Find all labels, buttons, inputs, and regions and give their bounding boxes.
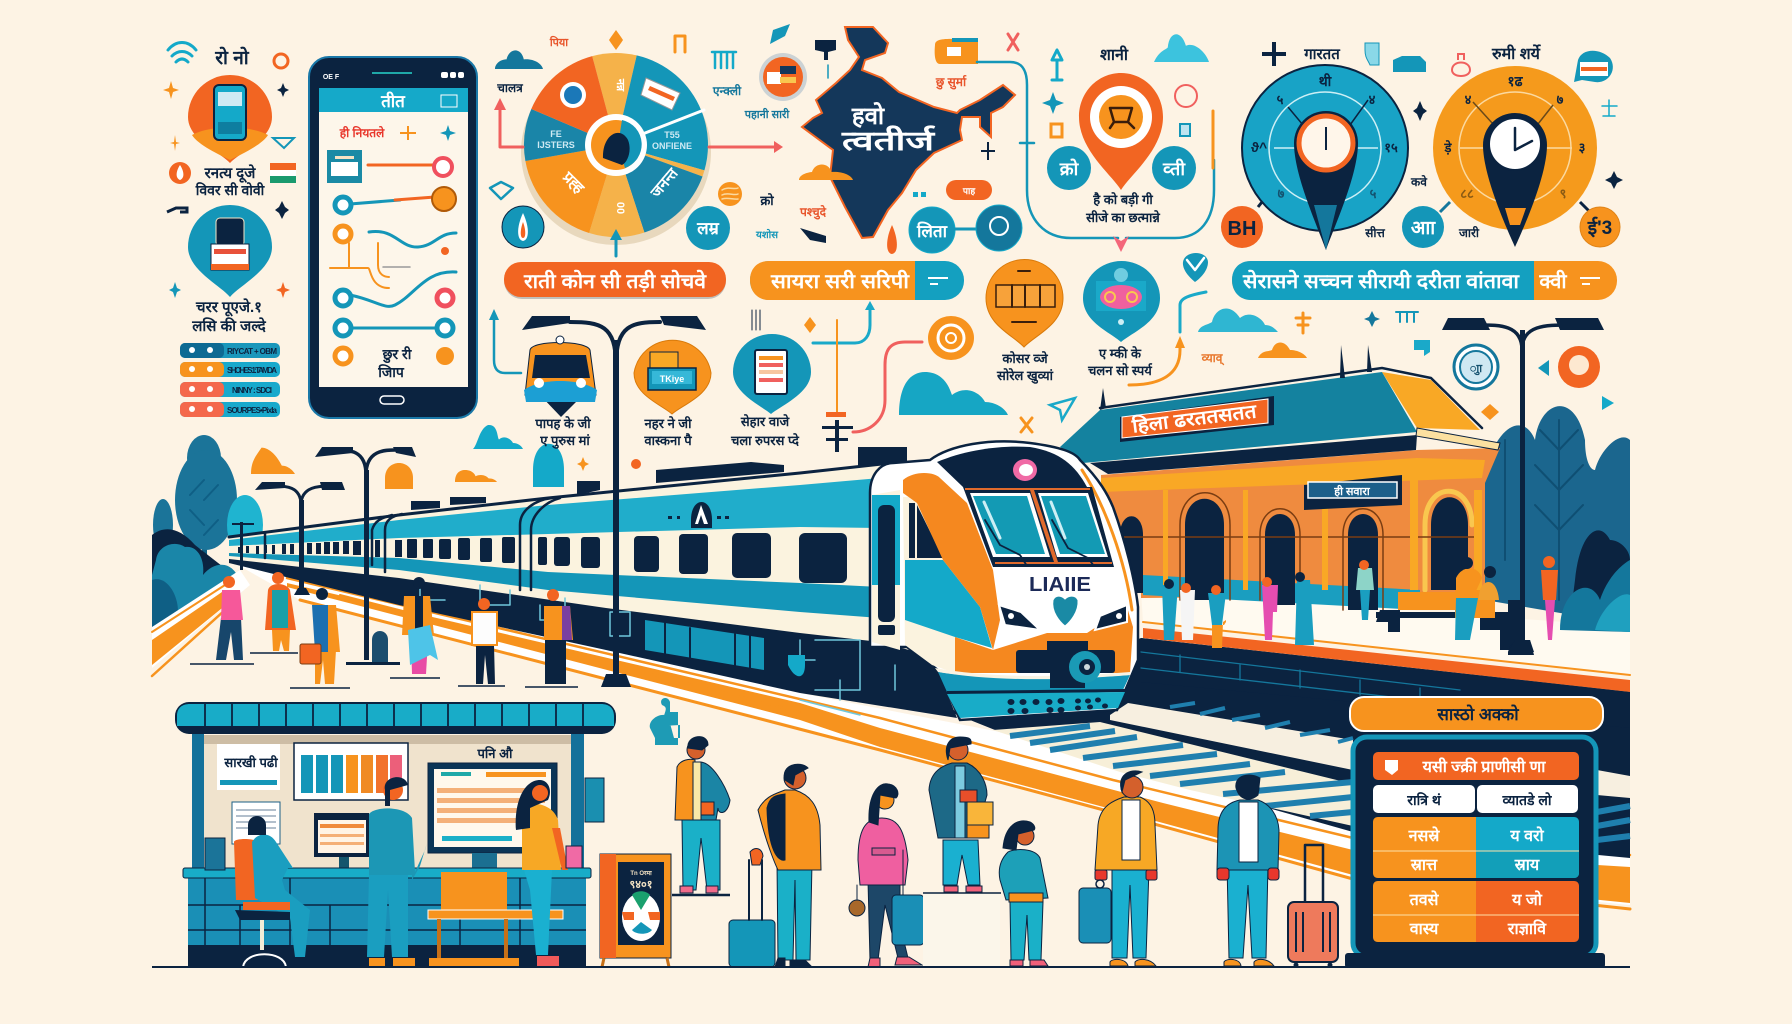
sign header [1350, 697, 1603, 731]
kiosk posts [192, 733, 584, 968]
pole and lines middle [822, 320, 922, 452]
people at the station [1162, 556, 1558, 652]
kiosk wall [204, 735, 571, 870]
status bar [323, 72, 464, 81]
map surroundings: पाह [962, 186, 976, 196]
roof sign: हिला ढरततसतत [1130, 399, 1259, 438]
pie wheel [521, 53, 711, 245]
passenger: teal jacket [1217, 775, 1279, 966]
main display [428, 763, 557, 869]
information stand [600, 854, 671, 967]
decor sparkles [163, 81, 294, 298]
passenger: yellow jacket [1079, 771, 1157, 966]
information column: top left [163, 42, 296, 417]
suitcase: coral [1288, 845, 1338, 967]
text block [191, 298, 267, 335]
text block: वास्कना पै [643, 433, 692, 448]
small monitor [314, 813, 369, 869]
text block [730, 414, 800, 448]
clouds, small icons between pins [752, 308, 1430, 432]
wheel labels: FE [550, 129, 562, 139]
arrow: to train pin [489, 309, 521, 373]
scene background: trees left [152, 435, 263, 633]
clock badges: कवे [1410, 175, 1428, 189]
clouds, small icons between pins: व्याव् [1201, 351, 1224, 366]
wheel labels: IJSTERS [537, 140, 575, 150]
sign cells: य वरो [1509, 826, 1545, 845]
text block: ए पुरुस मां [539, 433, 590, 449]
sign cells: नसस्रे [1408, 826, 1440, 845]
legend: SOURPES•Pixla [227, 406, 278, 415]
foreground platform band [229, 560, 1630, 909]
legend: RIYCAT + OBM [227, 347, 277, 356]
carriage doors [265, 498, 560, 590]
icon: wifi [168, 42, 196, 62]
roof beacon [1013, 459, 1037, 481]
text block: सीजे का छत्मान्ने [1085, 210, 1160, 225]
sign cells: व्यातडे लो [1501, 792, 1553, 808]
text block: है को बड़ी गी [1092, 192, 1153, 207]
banner: teal-yellow: क्वी [1538, 269, 1567, 293]
pin: display [1083, 261, 1160, 342]
pin: ticket machine [188, 205, 272, 297]
poster: text [217, 744, 280, 790]
carriage emblem [668, 502, 729, 528]
wheel labels: 00 [614, 202, 626, 214]
clock dial: teal: थी [1319, 73, 1333, 89]
pin: ticket counter [634, 340, 711, 414]
text block [996, 351, 1054, 384]
text block: चरर पूएजे.१ [195, 298, 262, 317]
kiosk [175, 702, 616, 968]
text block: पापह के जी [534, 416, 591, 431]
text block: ए म्की के [1098, 346, 1142, 361]
tracks [950, 638, 1630, 858]
lamp posts on the far platform [1442, 318, 1604, 655]
bench [428, 872, 563, 967]
orange sweep [903, 473, 1000, 650]
arrows around the wheel [494, 98, 783, 256]
clock dial: orange: ड़े [1444, 140, 1453, 155]
banner: orange: राती कोन सी तड़ी सोचवे [523, 269, 707, 293]
heading and decor: शानी [1100, 45, 1129, 64]
clock dial: orange [1433, 66, 1597, 247]
top right heading row: गारतत [1303, 46, 1341, 63]
poster: text: सारखी पढी [223, 755, 278, 770]
cloud and labels above the wheel [495, 30, 742, 98]
pin: tablet [733, 334, 811, 414]
status bar: OE F [323, 74, 340, 81]
passengers on the platform [190, 572, 578, 688]
clock dial: orange: ९ [1560, 186, 1566, 201]
text block: नहर ने जी [644, 416, 692, 431]
clock badges: ई'3 [1587, 216, 1612, 239]
station building [1060, 345, 1500, 610]
heading: रो नो [214, 46, 250, 69]
passenger: grey coat [923, 737, 1001, 893]
drop [887, 225, 897, 254]
banner: teal-yellow: सेरासने सच्चन सीरायी दरीता वांतावा [1242, 269, 1520, 293]
india map [802, 27, 1015, 254]
clock dial: orange: ७ [1557, 92, 1564, 107]
legend: NINNY : SDCI [232, 386, 272, 395]
text block [534, 416, 591, 449]
timetable sign [1345, 697, 1605, 968]
seated clerk [234, 816, 310, 967]
text block: चला रुपरस प्दे [730, 433, 800, 448]
map title: हवो [851, 102, 885, 130]
banner: yellow-teal [750, 261, 964, 300]
clock dial: teal: ५ [1370, 186, 1377, 201]
legend: SHOHES 1:TAMDA [227, 366, 277, 375]
text block: कोसर व्जे [1001, 351, 1049, 366]
undercarriage panels [420, 582, 895, 715]
clock dial: teal: ϑ^ [1251, 139, 1267, 155]
home button [380, 396, 404, 404]
badge: orange swirl [928, 316, 974, 360]
wheel labels: ONFIENE [652, 141, 692, 151]
connector frame [977, 62, 1214, 238]
step [923, 893, 1000, 967]
roof [1060, 372, 1417, 463]
left platform edge [152, 570, 250, 676]
connected badges [909, 205, 1022, 253]
windows [238, 533, 847, 583]
wheel labels: जनन्त [647, 164, 682, 202]
lamp posts on the near platform [232, 316, 706, 687]
sign cells: स्राय [1514, 857, 1540, 874]
wheel labels [537, 78, 692, 214]
banner: teal-yellow [1232, 261, 1617, 300]
map title: त्वतीर्ज [841, 125, 935, 156]
banner: yellow-teal: सायरा सरी सरिपी [770, 269, 910, 293]
facade [1101, 448, 1500, 598]
clock dial: teal: ७ [1278, 186, 1285, 201]
wheel labels: प्रह्ह [558, 168, 588, 198]
text block [1087, 346, 1153, 378]
route rows: छुर री [382, 346, 413, 364]
pin labels [1047, 146, 1196, 190]
cab logo: LIAIIE [1029, 574, 1091, 596]
smartphone [309, 57, 477, 418]
ground line [152, 966, 1630, 968]
map surroundings: क्रो [759, 193, 774, 208]
legend [180, 343, 280, 417]
heading and decor [1042, 34, 1209, 137]
hub [585, 114, 647, 176]
pin labels: क्रो [1059, 158, 1080, 179]
route list header [339, 125, 456, 141]
map surroundings: पश्चुदे [799, 205, 827, 220]
text block: सोरेल खुव्यां [996, 368, 1054, 384]
clock dial: orange: ४ [1465, 92, 1472, 107]
standing staff [367, 777, 427, 966]
app title: तीत [380, 91, 406, 111]
bumper and coupler [935, 641, 1130, 718]
wheel labels: नन्न [614, 78, 626, 92]
map surroundings: यशोस [755, 228, 779, 241]
text block: चलन सो स्पर्य [1087, 363, 1153, 378]
passenger: child [999, 821, 1048, 966]
pin: booking desk [986, 260, 1063, 347]
round badges around the wheel: लम्र [696, 219, 720, 238]
cab shield [1053, 596, 1078, 626]
sign header: सास्ठो अक्को [1436, 704, 1519, 724]
arrow: orange curve [1129, 336, 1185, 385]
plaque side [205, 838, 225, 870]
cloud and labels above the wheel: पिया [549, 35, 569, 49]
connected badges: लिता [916, 221, 948, 241]
sign title row [1373, 752, 1579, 780]
trees right of station [1485, 406, 1630, 632]
desk [183, 868, 591, 967]
top right heading row [1262, 42, 1623, 189]
connector marker [1113, 236, 1129, 252]
text block [643, 416, 692, 448]
clock dial: orange: १ढ [1507, 73, 1524, 89]
headlights [999, 605, 1127, 630]
round badges around the wheel [490, 182, 742, 250]
pin: ticket counter: TKiye [660, 374, 684, 384]
cloud and labels above the wheel: चालत्र [496, 81, 524, 95]
orange connector [1212, 111, 1214, 168]
passenger: backpack [729, 764, 821, 967]
clock dial: orange: ३ [1579, 140, 1586, 155]
side display [585, 778, 604, 822]
small figure by the band [650, 698, 680, 745]
arch doors [1120, 516, 1143, 593]
clock badges: BH [1228, 218, 1256, 240]
sign cells: रात्रि थं [1406, 792, 1442, 808]
cloud and labels above the wheel: एन्क्ली [712, 84, 742, 98]
route rows [327, 150, 456, 380]
passenger: orange jacket [672, 737, 730, 895]
route list header: ही नियतले [339, 126, 385, 140]
icon: swirl [274, 54, 288, 68]
clock badges: आा [1411, 218, 1436, 239]
sign cells: स्रात्त [1410, 857, 1438, 874]
passenger: pink top [849, 784, 924, 967]
text block: विवर सी वोवी [195, 182, 266, 198]
train [229, 441, 1138, 720]
pin: phone [188, 75, 272, 163]
roof sign [1120, 396, 1274, 442]
location pin centre [1079, 73, 1163, 190]
badges near the far lamp: ाुा [1470, 363, 1483, 376]
cab door [872, 490, 900, 650]
station name board: ही सवारा [1333, 484, 1371, 498]
poster: bars [294, 743, 408, 800]
information stand: ९४०१ [630, 879, 652, 891]
text block [1085, 192, 1160, 225]
arrow: teal elbow [813, 301, 875, 343]
banner: orange [504, 262, 726, 299]
clock dial: teal: ४ [1369, 92, 1376, 107]
clock badges [1221, 175, 1620, 248]
decor: clouds and suns above the train [251, 425, 641, 489]
text block: सेहार वाजे [740, 414, 790, 429]
clock badges: सीत्त [1364, 226, 1385, 240]
map surroundings: पहानी सारी [744, 107, 790, 121]
pin labels: व्ती [1162, 158, 1186, 179]
top right heading row: रुमी शर्ये [1491, 44, 1542, 63]
clock dial: teal: १५ [1384, 140, 1398, 155]
station name board [1304, 475, 1402, 510]
wheel labels: T55 [664, 130, 680, 140]
woman at screen [516, 780, 582, 966]
wall chart [232, 802, 280, 844]
map surroundings [744, 24, 1018, 243]
connector teal with icon [1180, 253, 1208, 332]
clock dial: teal: ५ [1277, 92, 1284, 107]
label: पनि औ [477, 746, 513, 761]
windscreen [963, 487, 1114, 567]
text block: लसि की जल्दे [191, 317, 267, 335]
sign cells: य जो [1511, 890, 1543, 909]
sign cells: राज्ञावि [1507, 919, 1547, 938]
carriage body [229, 462, 900, 648]
map surroundings: छु सुर्मा [935, 75, 967, 90]
icon: flame badge [169, 162, 191, 184]
route rows: जिाप [377, 364, 405, 380]
clock dial: orange: ८८ [1460, 186, 1474, 201]
information stand: Tn Oरमा [630, 871, 652, 877]
icon: flag [270, 163, 296, 183]
sign cells: वास्य [1409, 921, 1439, 938]
pin: train [524, 336, 597, 417]
text block: रनत्य दूजे [204, 164, 256, 183]
kiosk roof [175, 702, 616, 734]
clock dial: teal [1242, 65, 1408, 250]
badges near the far lamp [1454, 345, 1614, 420]
dark cap [937, 447, 1087, 487]
text block [195, 164, 266, 198]
roof units [411, 447, 907, 510]
station platform [1141, 590, 1630, 728]
map title [841, 102, 935, 156]
foreground passengers [672, 737, 1338, 967]
sign cells: तवसे [1409, 890, 1440, 909]
sign cells [1373, 785, 1579, 942]
cab body [870, 441, 1138, 720]
sign title row: यसी ज्क्री प्राणीसी णा [1422, 757, 1546, 776]
clock badges: जारी [1458, 226, 1480, 240]
